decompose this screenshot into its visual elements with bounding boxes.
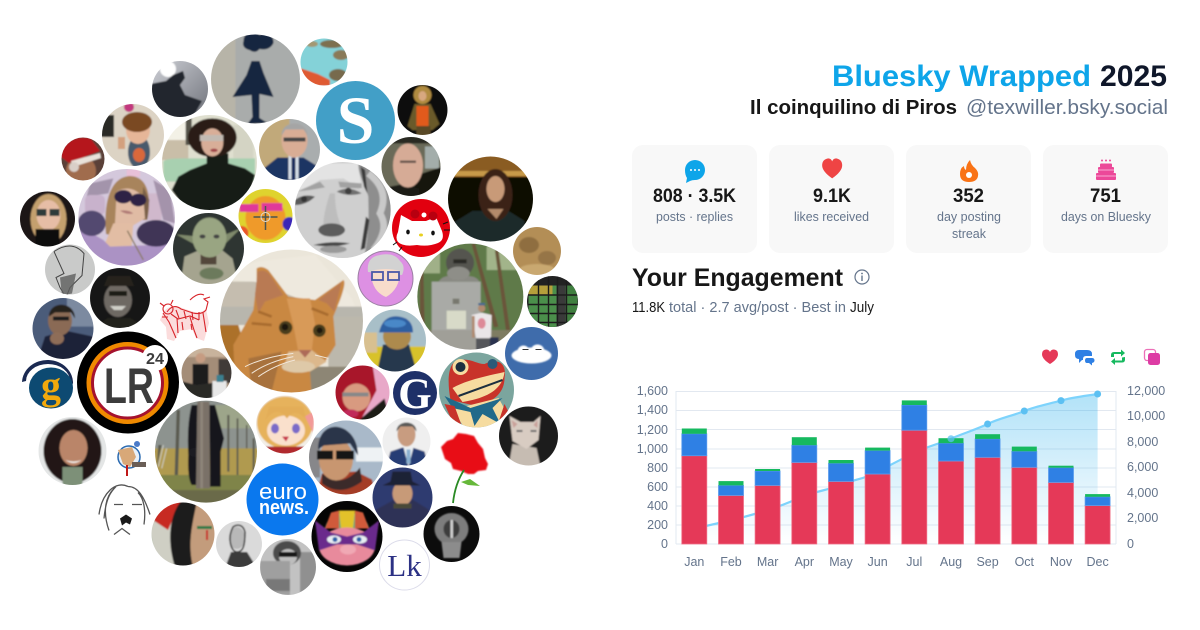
avatar: brain scan [422,505,480,563]
month labels: Oct [1015,555,1035,569]
bars: likes [682,430,1110,544]
grid lines [676,391,1116,544]
avatar: ink drawing of gagged woman [99,485,150,534]
bars: reposts [682,400,1110,497]
cumulative area and line [694,390,1101,544]
right axis labels: 6,000 [1127,460,1158,474]
avatar: speaker on stage [180,347,232,399]
icon: info [855,270,869,284]
avatar: Guardian G logo: G [398,371,432,418]
panel: likes received: 9.1K [813,186,851,207]
left axis labels: 1,000 [637,442,668,456]
avatar: cartoon man with blue glasses [358,251,413,306]
avatar: Lk logo: Lk [387,548,422,583]
avatar: rock singer [396,84,448,136]
icon: quotes [1144,350,1160,365]
avatar: g logo [22,360,73,408]
panel: days on Bluesky [1043,145,1168,253]
avatar: Lk logo [380,540,430,590]
avatar: woman with sunglasses in purple [77,167,177,270]
avatar: man in suit [259,119,320,180]
subtitle: name and handle: Il coinquilino di Piros [750,97,957,119]
avatar: LR 24 logo: LR [104,358,154,414]
subtitle: name and handle [750,97,1168,119]
icon: heart [822,158,842,178]
panel: days on Bluesky: days on Bluesky [1061,209,1151,224]
panel: posts and replies [632,145,757,253]
icon: flame [960,160,978,182]
left axis labels: 0 [661,537,668,551]
month labels: Mar [757,555,778,569]
avatar: red-haired woman [334,364,390,420]
bars: replies [682,405,1110,506]
right axis labels: 2,000 [1127,511,1158,525]
Aug line point [948,435,954,442]
left axis labels: 800 [647,461,668,475]
left axis labels: 600 [647,480,668,494]
avatar: samurai illustration [372,466,434,528]
month labels: Nov [1050,555,1073,569]
combo chart: monthly engagement [637,384,1165,569]
month labels [684,555,1109,569]
avatar: cubist drawing [45,244,95,294]
avatar: LR 24 logo: 24 [146,351,164,368]
panel: likes received [769,145,894,253]
avatar: dark silhouette against sky [152,61,208,117]
stacked bars [682,400,1110,544]
engagement summary: 11.8K [632,300,665,316]
subtitle: name and handle: @texwiller.bsky.social [966,97,1168,119]
avatar: euronews logo [246,464,318,536]
avatar: man with hat in monochrome [89,267,151,329]
avatar: thermal image [238,189,292,243]
avatar: man with beanie and sunglasses [308,420,384,496]
avatar: man by a blue window [31,296,95,360]
avatar: teal map illustration [300,38,348,86]
month labels: May [829,555,854,569]
avatar: antique map [512,226,562,276]
icon: red carnation [441,433,488,503]
panel: posts and replies: posts · replies [656,209,733,224]
avatar: blonde woman with glasses [20,192,75,246]
icon: replies [1075,350,1094,366]
icon: small blog mascot [118,441,146,476]
chart legend icons [1042,350,1160,366]
panel: day posting streak: streak [952,226,986,241]
panel: day posting streak: 352 [953,186,984,207]
right axis labels [1127,384,1165,551]
avatar: woman in black turtleneck on green chair [162,115,257,210]
avatar: black and white woman's face [293,160,393,260]
panel: posts and replies: 808 · 3.5K [653,186,736,207]
left axis labels [637,384,668,551]
icon: red line tiger [160,294,210,341]
right axis labels: 10,000 [1127,409,1165,423]
heading: your engagement: Your Engagement [632,264,844,292]
avatar: monochrome person with book [259,538,317,596]
month labels: Dec [1086,555,1109,569]
avatar: orange tabby cat [218,248,365,395]
avatar: blue S logo: S [337,82,374,158]
title: 2025 [1100,60,1167,93]
month labels: Apr [795,555,814,569]
avatar: euronews logo: euro [259,479,307,504]
panel: day posting streak: day posting [937,209,1001,224]
month labels: Feb [720,555,742,569]
right axis labels: 4,000 [1127,486,1158,500]
month labels: Jan [684,555,704,569]
title: Bluesky Wrapped [832,60,1091,93]
left axis labels: 1,600 [637,384,668,398]
icon: speech bubble [685,160,705,183]
panel: day posting streak [906,145,1031,253]
avatar: wordle grid [527,276,578,327]
avatar: sketch portrait [215,520,263,568]
month labels: Aug [940,555,962,569]
left axis labels: 1,200 [637,423,668,437]
avatar: Yoda [172,212,246,286]
avatar: LR 24 logo [77,332,179,434]
avatar: hello kitty [392,199,450,257]
avatar: santa hat [62,138,104,180]
avatar: bust of Marx with visitor [415,242,525,352]
right axis labels: 0 [1127,537,1134,551]
avatar: white kitten [498,405,560,467]
avatar: cloud with eyes [505,327,558,380]
avatar: politician in suit [382,416,432,466]
left axis labels: 200 [647,518,668,532]
engagement summary: July [850,300,875,316]
icon: reposts [1111,350,1125,365]
avatar: woman at night [446,155,534,243]
avatar: g logo: g [41,363,61,408]
icon: cake [1096,160,1116,180]
avatar: anime girl [255,394,315,454]
avatar: Palestine mural [150,501,216,567]
avatar: bald man [382,137,440,196]
avatar: purple masked pig [310,500,384,574]
avatar: blue S logo [316,81,395,160]
month labels: Jun [868,555,888,569]
engagement summary: total · 2.7 avg/post · Best in [669,300,846,316]
panel: avatar bubble cluster [18,29,580,596]
avatar: cat in blue cap [363,308,427,372]
avatar: girl with flower [102,104,164,166]
month labels: Jul [906,555,922,569]
right axis labels: 12,000 [1127,384,1165,398]
icon: likes [1042,350,1058,364]
panel: days on Bluesky: 751 [1090,186,1121,207]
avatar: euronews logo: news. [259,497,309,519]
left axis labels: 400 [647,499,668,513]
avatar: smiling curly-haired woman [38,416,108,489]
right axis labels: 8,000 [1127,435,1158,449]
month labels: Sep [976,555,999,569]
avatar: stencil girl [211,34,300,124]
panel: likes received: likes received [794,209,869,224]
avatar: bear behind tree [153,398,260,505]
left axis labels: 1,400 [637,403,668,417]
avatar: frog poster [438,351,516,429]
